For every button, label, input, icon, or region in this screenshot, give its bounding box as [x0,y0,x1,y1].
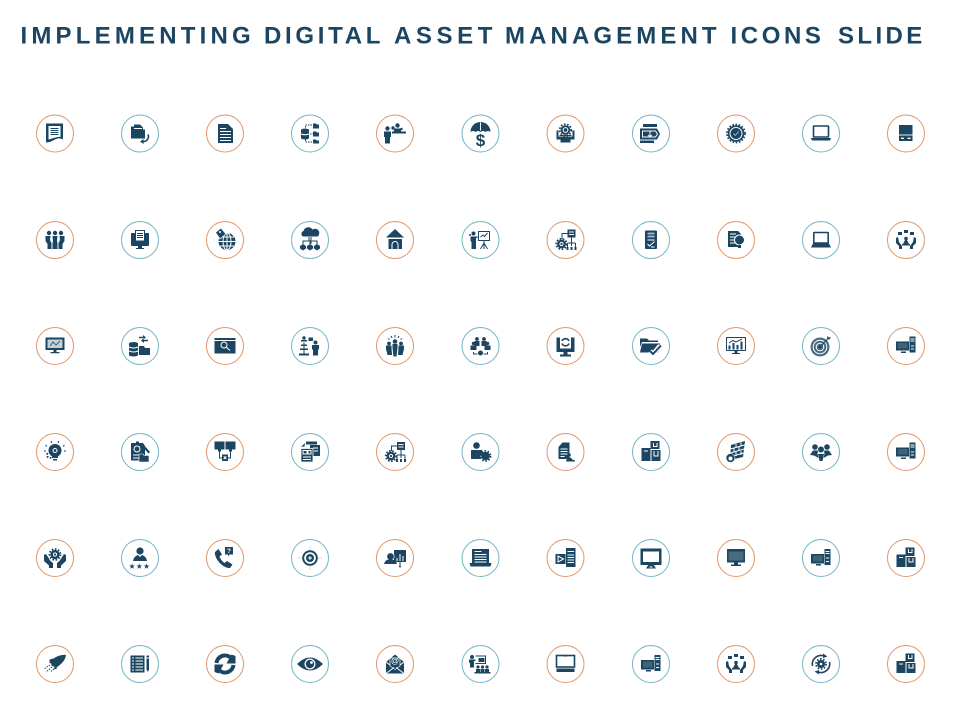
icon: hands with network [888,222,924,258]
icon: video and mobile [547,540,584,576]
icon: presenter with audience [462,646,499,682]
icon: three people [36,222,74,258]
icon: monitor with sync [547,328,584,364]
icon: team of three [802,434,840,470]
icon: brick wall with flame [718,434,754,470]
icon: light bulb with gear [36,434,74,470]
icon: checklist with pencil [122,646,158,682]
icon: clipboard with gear and folder [122,434,158,470]
icon: umbrella and dollar [462,115,499,152]
title: MANAGEMENT [505,22,721,50]
icon: text document [206,115,244,152]
icon: database with folder and arrows [122,328,158,364]
icon: person with star rating [122,540,158,576]
icon: gear with check [718,115,754,152]
icon: connected monitors [206,434,244,470]
icon: sync arrows [206,646,244,682]
icon: stacked boxes [632,434,670,470]
icon: film with anchor [632,115,670,152]
icon: house [376,222,414,258]
icon: crosshair target [292,540,328,576]
icon: desktop computer [888,328,924,364]
icon: tablet [632,222,670,258]
icon: monitor with document [122,222,158,258]
icon: stacked boxes [888,646,924,682]
icon: eye [292,646,328,682]
icon: solid laptop [802,222,840,258]
title [20,22,926,50]
icon: globe with tag [206,222,244,258]
icon: monitor outline with base [547,646,584,682]
icon: target with dart [802,328,840,364]
icon: monitor with bar chart [718,328,754,364]
icon: database with folders [292,115,328,152]
icon: laptop with gear [547,115,584,152]
icon: laptop with window [462,540,499,576]
icon: document with person [547,434,584,470]
title: DIGITAL [264,22,384,50]
icon: people group with arrows [462,328,499,364]
icon: desktop computer [632,646,670,682]
icon: stacked boxes [888,540,924,576]
icon: phone with question mark [206,540,244,576]
icon: large monitor [632,540,670,576]
icon: desktop computer [802,540,840,576]
icon: person with team at table [376,115,414,152]
title: ASSET [394,22,497,50]
icon: person with hierarchy [292,328,328,364]
icon: document with light bulb [718,222,754,258]
icon: folder with check [632,328,670,364]
icon: gear with org chart [547,222,584,258]
icon: person with bar chart board [376,540,414,576]
icon: document with ribbon [36,115,74,152]
icon: person with gear [462,434,499,470]
icon: hands with network [718,646,754,682]
icon: person with star rating: ★★★ [129,562,151,570]
icon: gear with flow chart [376,434,414,470]
icon: folder with arrow [122,115,158,152]
icon: three people with light [376,328,414,364]
icon: laptop outline [802,115,840,152]
icon: cloud network [292,222,328,258]
icon: window with magnifier [206,328,244,364]
icon: hands holding gear [36,540,74,576]
icon: envelope with at sign: @ [391,656,399,666]
icon: envelope with at sign [376,646,414,682]
icon: presenter with board [462,222,499,258]
title: SLIDE [838,22,926,50]
icon: rocket [36,646,74,682]
title: ICONS [730,22,825,50]
icon: gear with circular arrows [802,646,840,682]
icon: stacked windows [292,434,328,470]
icon: phone with question mark: ? [227,548,231,555]
icon: device panel [888,115,924,152]
icon: desktop computer [888,434,924,470]
icon: monitor with stand [718,540,754,576]
title: IMPLEMENTING [20,22,255,50]
icon: umbrella and dollar: $ [476,131,486,150]
icon: monitor with chart [36,328,74,364]
